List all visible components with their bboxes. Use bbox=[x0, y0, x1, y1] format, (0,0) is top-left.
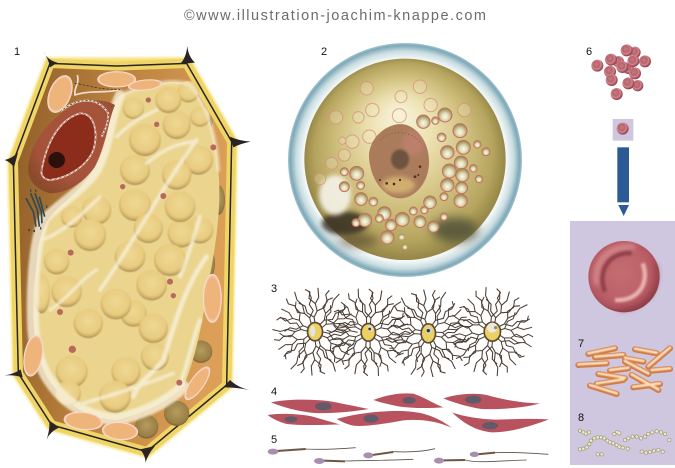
dark and light smudges bbox=[319, 175, 478, 247]
endoplasmic reticulum bbox=[60, 75, 120, 137]
label 3: 3 bbox=[271, 283, 277, 295]
label 5: 5 bbox=[271, 434, 277, 446]
title: copyright line: ©www.illustration-joachim-knappe.com bbox=[184, 8, 486, 24]
cytoplasm sphere bbox=[304, 59, 506, 260]
pale upper vesicles bbox=[314, 80, 471, 185]
cell 1: plant cell bbox=[5, 46, 251, 463]
nucleus bbox=[28, 100, 115, 193]
cell bodies bbox=[307, 321, 501, 344]
label 7: 7 bbox=[578, 338, 584, 350]
label 6: 6 bbox=[586, 46, 592, 58]
cell wall yellow glow bbox=[13, 63, 232, 452]
small vesicles bbox=[57, 97, 216, 386]
row 3: nerve cells bbox=[268, 274, 549, 464]
vacuole membrane film bbox=[33, 82, 218, 420]
chloroplasts bbox=[21, 72, 221, 441]
dim background discs bbox=[110, 112, 225, 439]
cell 2: egg cell bbox=[288, 43, 522, 277]
label 1: 1 bbox=[14, 46, 20, 58]
label 2: 2 bbox=[321, 46, 327, 58]
vesicles bbox=[339, 108, 490, 249]
golgi apparatus bbox=[26, 191, 47, 231]
cytoplasm bbox=[13, 63, 232, 452]
row 5: sperm cells bbox=[268, 448, 548, 464]
top right: red blood cell group and arrow bbox=[591, 44, 651, 216]
vacuole bbox=[33, 82, 219, 420]
lower right panel contents bbox=[578, 241, 670, 454]
row 8: coccus chains bbox=[580, 431, 669, 454]
nucleus bbox=[369, 124, 429, 198]
large red blood cell bbox=[588, 241, 660, 312]
vacuole discs bbox=[33, 81, 213, 413]
label 4: 4 bbox=[271, 386, 277, 398]
row 4: muscle cells bbox=[268, 393, 549, 432]
nucleolus bbox=[48, 152, 65, 168]
dark cell wall line and junctions bbox=[5, 46, 251, 463]
zona outer ring bbox=[288, 43, 522, 277]
red blood cell cluster bbox=[591, 44, 651, 100]
label 8: 8 bbox=[578, 412, 584, 424]
dendrites bbox=[272, 274, 549, 390]
lavender panel bbox=[570, 221, 675, 465]
magnified inset square bbox=[613, 119, 633, 141]
nucleolus bbox=[391, 149, 409, 169]
row 7: rod cells bbox=[578, 348, 670, 394]
arrow bbox=[617, 147, 629, 216]
